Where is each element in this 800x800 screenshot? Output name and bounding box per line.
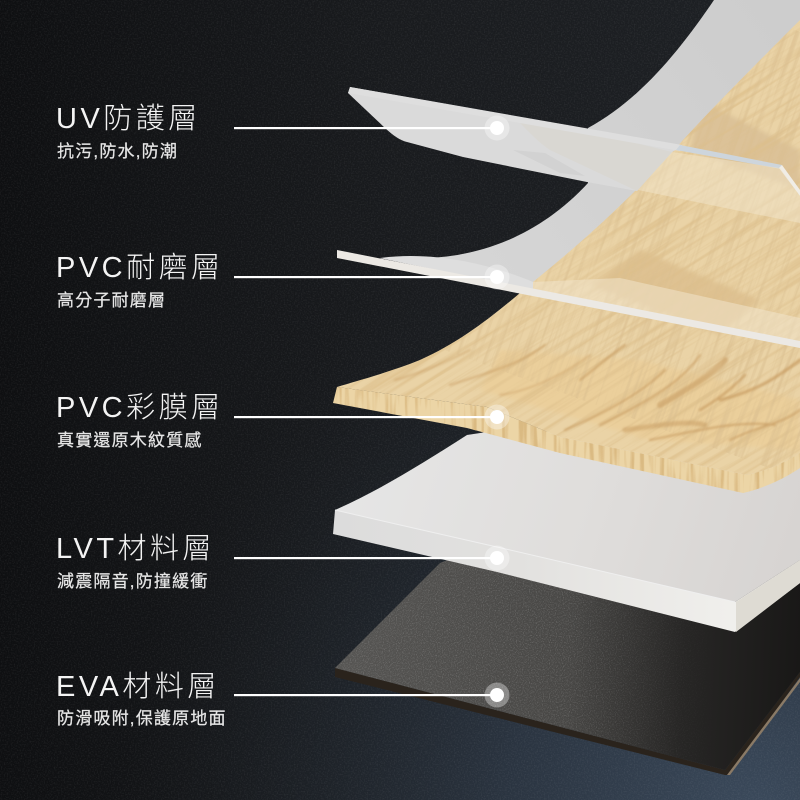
- heading: PVC film: PVC彩膜層: [56, 391, 224, 424]
- layer: EVA foam sheet: [335, 560, 800, 775]
- callout 4: LVT: [56, 532, 510, 591]
- layer: UV protective layer: [348, 87, 800, 223]
- description: PVC film: 真實還原木紋質感: [57, 430, 203, 450]
- callout 2: PVC wear: [56, 251, 510, 310]
- description: LVT: 減震隔音,防撞緩衝: [57, 572, 209, 591]
- leader line: UV: [234, 116, 510, 140]
- layer: PVC colour film wood: [333, 20, 800, 493]
- description: PVC wear: 高分子耐磨層: [57, 291, 166, 310]
- leader line: EVA: [234, 682, 510, 708]
- description: UV: 抗污,防水,防潮: [57, 142, 178, 161]
- heading: EVA: EVA材料層: [56, 670, 220, 703]
- description: EVA: 防滑吸附,保護原地面: [57, 709, 227, 728]
- wood grain streaks: [395, 345, 800, 440]
- layer: PVC wear layer: [337, 250, 800, 348]
- layer: LVT core sheet: [333, 430, 800, 632]
- callout 5: EVA: [56, 670, 510, 728]
- heading: PVC wear: PVC耐磨層: [56, 251, 224, 284]
- wood planks: [480, 100, 800, 450]
- leader line: LVT: [234, 546, 510, 570]
- leader line: PVC film: [234, 404, 510, 430]
- leader line: PVC wear: [234, 264, 510, 290]
- heading: UV: UV防護層: [56, 102, 201, 135]
- heading: LVT: LVT材料層: [56, 532, 215, 565]
- callout 3: PVC colour film: [56, 391, 510, 450]
- layer: upper white band behind wood: [380, 0, 800, 290]
- callout 1: UV: [56, 102, 510, 161]
